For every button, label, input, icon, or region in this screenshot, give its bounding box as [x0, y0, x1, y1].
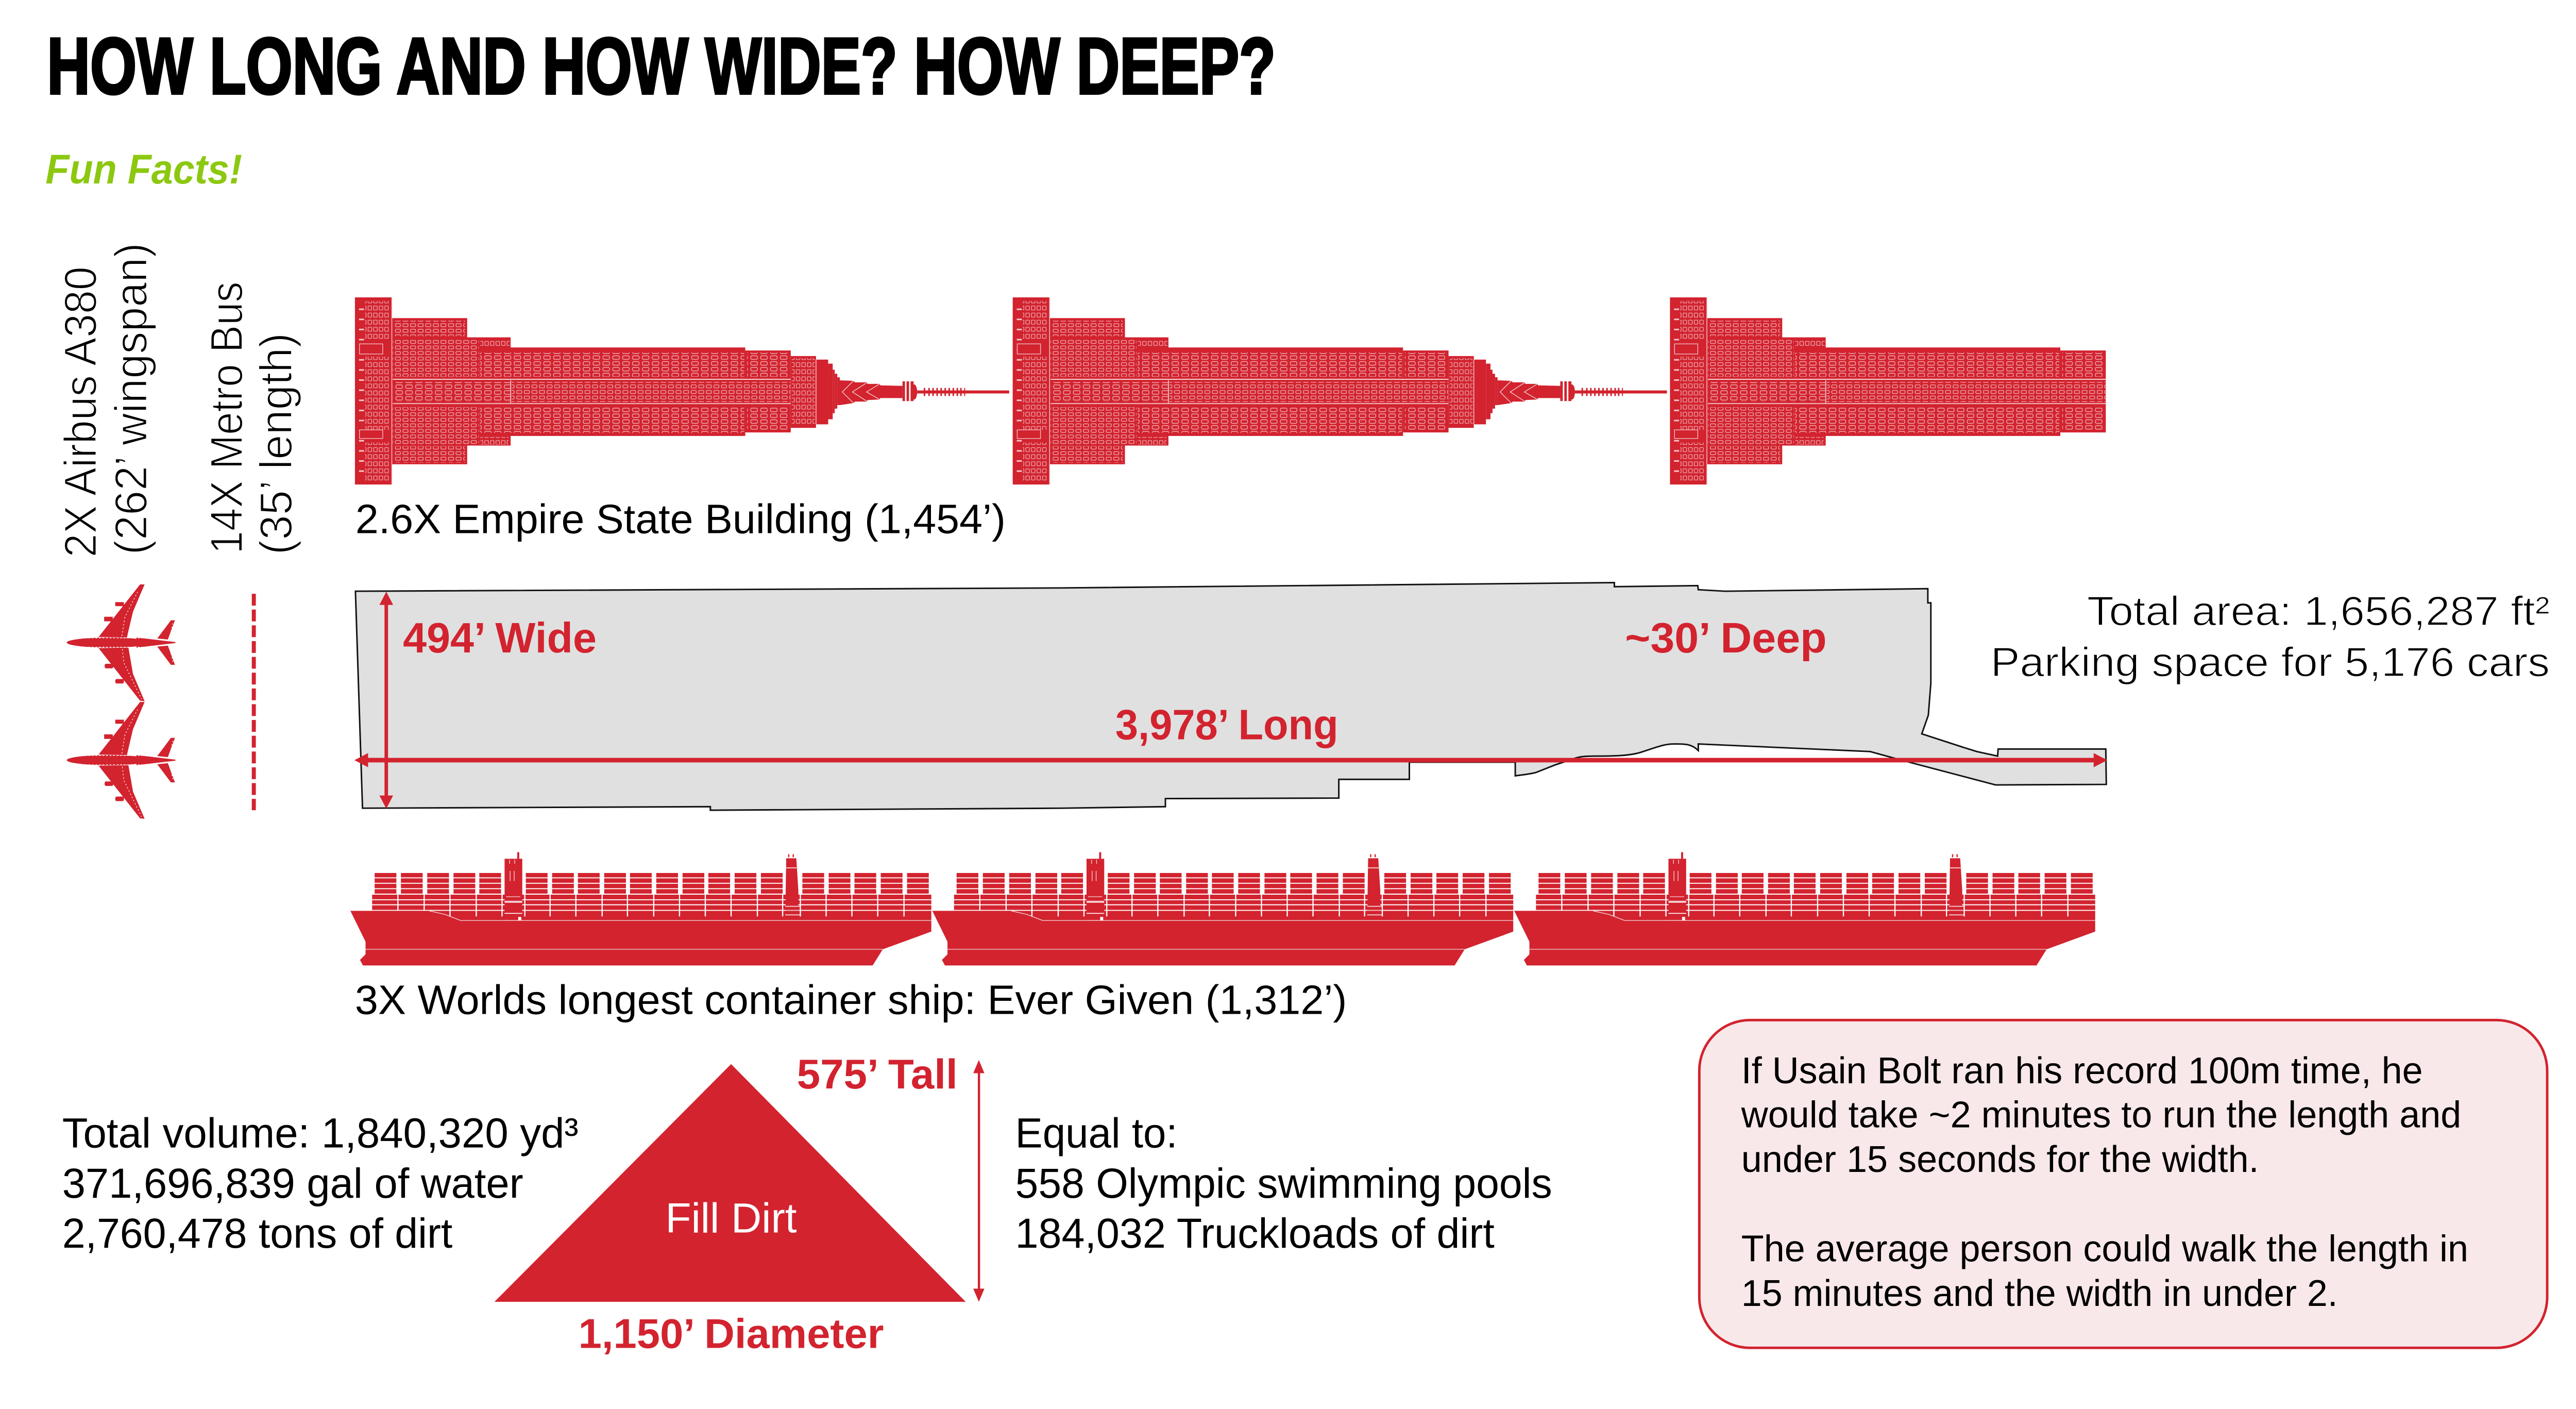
vertical label: Airbus A380: [55, 243, 157, 557]
arrow: length: [354, 753, 2107, 767]
building 1: [355, 297, 1009, 484]
subtitle: fun facts: Fun Facts!: [45, 146, 242, 193]
equivalents text: 184,032 Truckloads of dirt: [1015, 1210, 1495, 1257]
fill dirt triangle: Fill Dirt: [665, 1195, 797, 1242]
height label: 575’ Tall: [797, 1051, 958, 1098]
equivalents text: [1015, 1110, 1552, 1257]
building 2: [1013, 297, 1667, 484]
width label: 494’ Wide: [403, 614, 597, 662]
container ship row: [350, 852, 2095, 965]
callout: Usain Bolt facts: under 15 seconds for the width.: [1741, 1138, 2259, 1180]
area text: [1991, 588, 2550, 685]
callout: Usain Bolt facts: would take ~2 minutes to run the length and: [1741, 1094, 2461, 1135]
vertical label: Metro Bus: [201, 282, 301, 555]
area text: Total area: 1,656,287 ft²: [2087, 588, 2550, 634]
vertical label: Airbus A380: 2X Airbus A380: [55, 266, 106, 557]
arrow: height: [973, 1060, 985, 1302]
volume text: 371,696,839 gal of water: [62, 1160, 523, 1207]
icon: two Airbus A380 planes: [67, 584, 176, 819]
icon: dashed line of 14 buses: [252, 594, 256, 810]
area text: Parking space for 5,176 cars: [1991, 639, 2550, 685]
callout: Usain Bolt facts: 15 minutes and the width in under 2.: [1741, 1272, 2338, 1314]
vertical label: Metro Bus: (35’ length): [250, 333, 301, 555]
volume text: [62, 1110, 579, 1257]
vertical label: Airbus A380: (262’ wingspan): [106, 243, 157, 555]
diameter label: 1,150’ Diameter: [579, 1311, 884, 1357]
length label: 3,978’ Long: [1115, 701, 1338, 749]
empire state building row: [355, 297, 2106, 484]
ship caption: 3X Worlds longest container ship: Ever Given (1,312’): [355, 977, 1347, 1023]
title: HOW LONG AND HOW WIDE? HOW DEEP?: [47, 22, 1276, 111]
equivalents text: Equal to:: [1015, 1110, 1178, 1157]
building 3 (partial): [1670, 297, 2106, 484]
depth label: ~30’ Deep: [1625, 614, 1827, 662]
empire state building caption: 2.6X Empire State Building (1,454’): [355, 496, 1006, 542]
ground outline shape: [355, 583, 2106, 810]
callout: Usain Bolt facts: The average person could walk the length in: [1741, 1228, 2468, 1269]
callout: Usain Bolt facts: [1699, 1020, 2547, 1348]
volume text: Total volume: 1,840,320 yd³: [62, 1110, 579, 1157]
vertical label: Metro Bus: 14X Metro Bus: [201, 282, 252, 554]
callout: Usain Bolt facts: If Usain Bolt ran his record 100m time, he: [1741, 1050, 2423, 1092]
ship 2: [933, 852, 1513, 965]
arrow: width: [380, 592, 393, 809]
equivalents text: 558 Olympic swimming pools: [1015, 1160, 1552, 1207]
fill dirt triangle: [495, 1064, 965, 1302]
ship 1: [350, 852, 931, 965]
ship 3: [1514, 852, 2095, 965]
volume text: 2,760,478 tons of dirt: [62, 1210, 453, 1257]
